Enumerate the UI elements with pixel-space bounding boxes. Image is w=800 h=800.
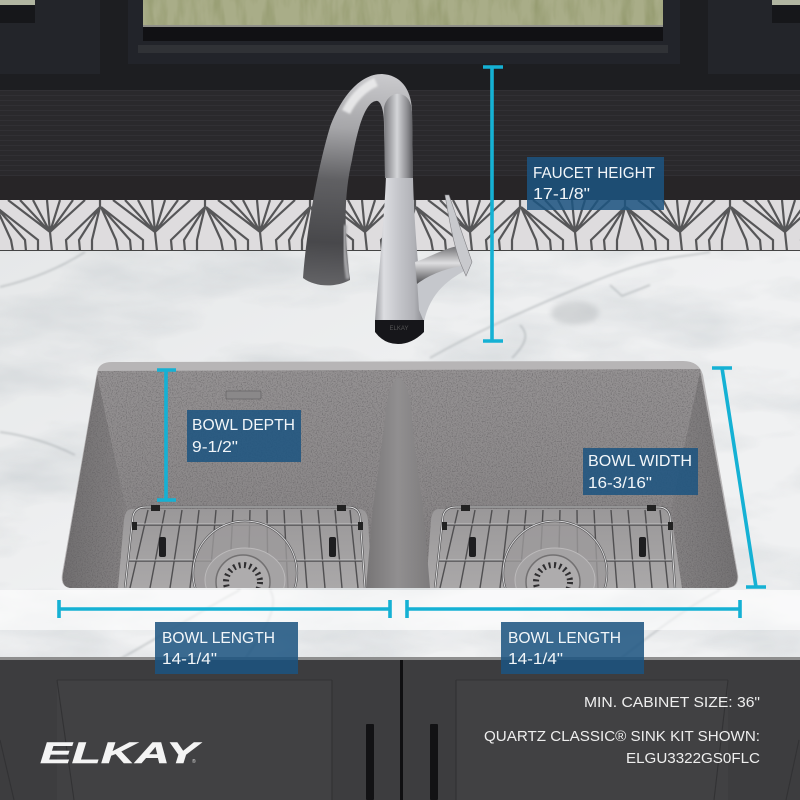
label: left bowl length: BOWL LENGTH [162, 630, 275, 647]
label: left bowl length: 14-1/4" [162, 651, 217, 668]
label: bowl width: BOWL WIDTH [588, 453, 692, 470]
measure: left bowl length [59, 600, 390, 618]
label: bowl width [583, 448, 698, 495]
dish rack right [434, 505, 676, 588]
label: right bowl length: 14-1/4" [508, 651, 563, 668]
label: left bowl length [155, 622, 298, 674]
cabinets [0, 660, 800, 800]
label: faucet height [527, 157, 664, 210]
handle [415, 246, 462, 284]
center divider [366, 377, 430, 588]
label: faucet height: FAUCET HEIGHT [533, 165, 656, 182]
label: bowl depth: BOWL DEPTH [192, 417, 295, 434]
label: bowl depth: 9-1/2" [192, 439, 238, 456]
measure: bowl depth [157, 370, 176, 500]
faucet: ELKAY [390, 326, 408, 332]
logo: Elkay: ELKAY [40, 737, 202, 770]
note: cabinet size and model [484, 695, 760, 767]
dish rack left [124, 505, 366, 588]
flare [416, 260, 470, 322]
sink [62, 361, 738, 588]
backsplash tile [0, 200, 800, 251]
label: right bowl length: BOWL LENGTH [508, 630, 621, 647]
logo: Elkay [40, 737, 202, 770]
label: bowl depth [187, 410, 301, 462]
background: wall and window [0, 0, 800, 200]
label: right bowl length [501, 622, 644, 674]
logo: Elkay: ® [192, 758, 196, 765]
label: faucet height: 17-1/8" [533, 186, 590, 203]
bowl floors [118, 509, 682, 588]
body [375, 176, 424, 320]
note: cabinet size and model: QUARTZ CLASSIC® SINK KIT SHOWN: [484, 729, 760, 745]
marble countertop [0, 251, 800, 660]
measure: bowl width [712, 368, 766, 587]
cabinet handles [366, 724, 438, 800]
rim [62, 361, 738, 588]
measure: faucet height [483, 67, 503, 341]
note: cabinet size and model: ELGU3322GS0FLC [626, 751, 760, 767]
overflow [226, 391, 261, 399]
faucet [303, 74, 472, 344]
spout [303, 74, 413, 285]
base [375, 320, 424, 344]
note: cabinet size and model: MIN. CABINET SIZE: 36" [584, 695, 760, 711]
label: bowl width: 16-3/16" [588, 475, 652, 492]
basin walls [63, 369, 737, 588]
measure: right bowl length [407, 600, 740, 618]
